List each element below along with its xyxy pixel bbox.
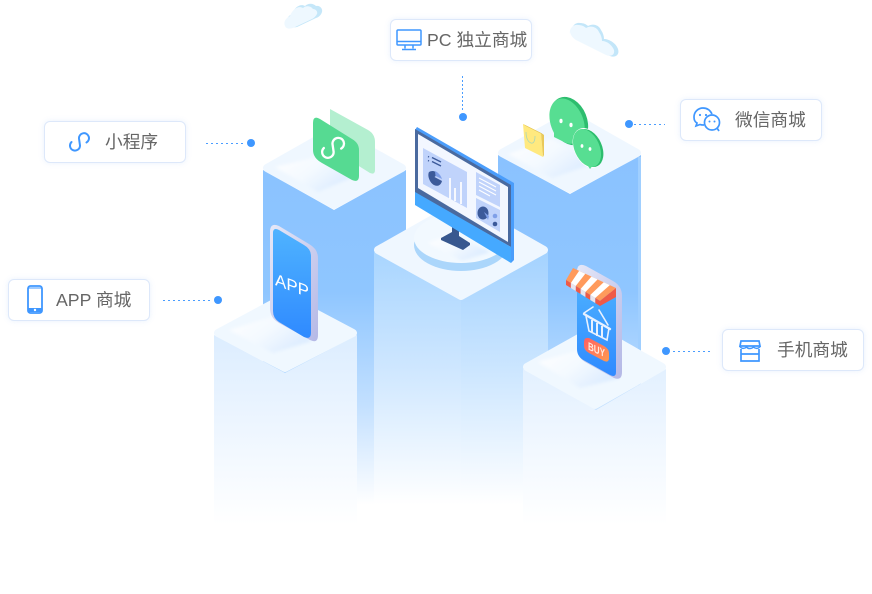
phone: shop: BUY — [588, 341, 605, 360]
connector: PC — [459, 76, 467, 121]
block: front left — [214, 297, 357, 525]
label: mini program — [44, 121, 186, 163]
block: front right — [523, 329, 666, 530]
icon: mini program — [69, 132, 90, 152]
label text: 微信商城 — [735, 110, 806, 130]
connector: APP — [163, 296, 222, 304]
label text: PC 独立商城 — [427, 30, 527, 50]
label: PC store — [390, 19, 532, 61]
basket — [584, 314, 610, 329]
connector: mobile — [662, 347, 712, 355]
dashboard lists and charts — [428, 156, 441, 166]
icon: monitor — [396, 29, 422, 50]
block: centre — [374, 203, 548, 515]
icon: mini program tiles — [313, 109, 375, 181]
icon: wechat — [693, 107, 720, 132]
label text: 手机商城 — [777, 340, 848, 360]
label: mobile store — [722, 329, 864, 371]
label text: 小程序 — [105, 132, 158, 152]
phone: shop — [566, 265, 622, 379]
label: APP store — [8, 279, 150, 321]
connector: mini program — [206, 139, 255, 147]
disk pedestal — [414, 213, 508, 271]
dashboard panels — [423, 148, 467, 208]
icon: storefront — [738, 340, 762, 362]
cloud left — [284, 4, 322, 29]
block: back left — [263, 130, 406, 505]
phone: APP — [270, 225, 318, 341]
phone: APP: APP — [275, 270, 309, 301]
monitor stand — [441, 226, 470, 250]
icon: phone — [27, 285, 43, 314]
monitor — [415, 127, 514, 263]
connector: wechat — [625, 120, 665, 128]
label text: APP 商城 — [56, 290, 131, 310]
cloud right — [570, 23, 618, 57]
label: WeChat store — [680, 99, 822, 141]
block: back right — [498, 115, 641, 505]
icon: shopping bag — [523, 124, 544, 157]
buy button — [584, 338, 609, 362]
awning — [566, 268, 616, 301]
icon: wechat bubbles — [543, 91, 609, 173]
